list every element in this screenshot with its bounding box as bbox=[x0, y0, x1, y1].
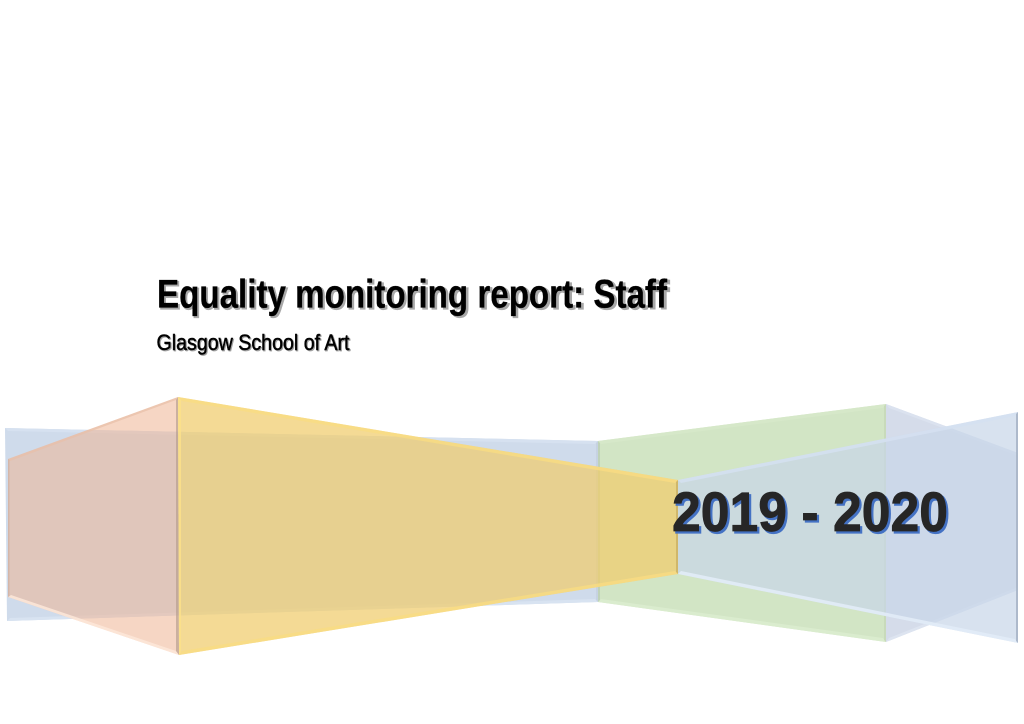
subtitle: Glasgow School of Art bbox=[156, 330, 350, 355]
date label: 2019 - 2020 bbox=[672, 480, 948, 543]
panel: peach wedge bbox=[8, 397, 179, 655]
panel: left blue band bbox=[5, 428, 598, 621]
title: Equality monitoring report: Staff bbox=[158, 274, 670, 318]
title: Equality monitoring report: Staff bbox=[157, 272, 668, 316]
subtitle: Glasgow School of Art bbox=[158, 331, 350, 356]
panel: light blue wedge bbox=[678, 412, 1018, 643]
panel: right blue wedge bbox=[886, 404, 1018, 642]
date label: 2019 - 2020 bbox=[674, 482, 950, 545]
panel: yellow band bbox=[178, 397, 678, 655]
ribbon graphic bbox=[5, 397, 1018, 655]
panel: green band bbox=[598, 404, 886, 642]
